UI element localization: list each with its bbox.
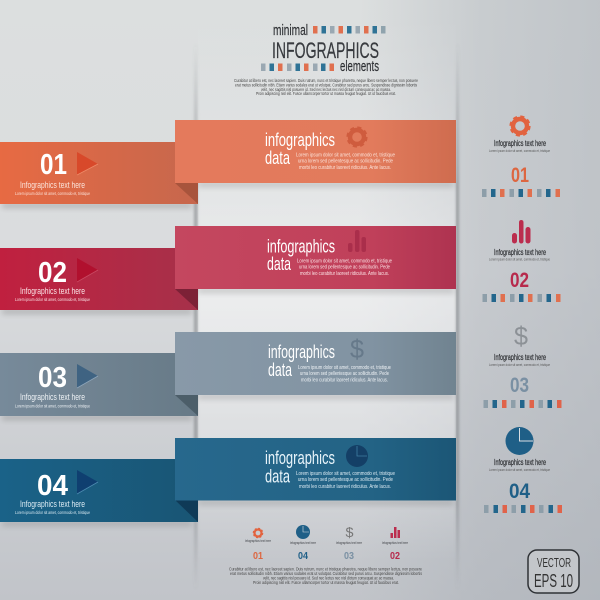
- body text: [296, 471, 395, 490]
- body text: [297, 258, 392, 277]
- number: 04: [298, 551, 308, 562]
- badge: vector eps 10: [528, 550, 579, 593]
- label: Infographics text here: [20, 499, 85, 510]
- right band: [175, 438, 456, 500]
- label: Infographics text here: [20, 286, 85, 297]
- icon: gear: [511, 117, 529, 135]
- panel: right column item 02: [482, 220, 560, 302]
- caption: Lorem ipsum dolor sit amet, commodo et, tristique: [15, 191, 90, 196]
- label: Infographics text here: [494, 248, 546, 257]
- arrow: [77, 364, 98, 388]
- heading block: [234, 22, 419, 96]
- icon: bar chart: [348, 230, 366, 252]
- badge: vector eps 10: EPS 10: [534, 571, 573, 591]
- right band: [175, 226, 456, 289]
- body text: [298, 365, 391, 384]
- heading: infographics: [265, 448, 335, 468]
- icon: dollar: $: [350, 334, 365, 364]
- arrow: [77, 258, 98, 282]
- fold: [175, 500, 198, 522]
- square row: [482, 189, 560, 197]
- number: 03: [344, 551, 354, 562]
- fold: [175, 289, 198, 310]
- body text: Lorem ipsum dolor sit amet, commodo et, tristique: [298, 365, 391, 371]
- left band: [0, 142, 198, 204]
- icon: dollar: $: [514, 321, 529, 351]
- square row: [484, 400, 562, 408]
- right band: [175, 332, 456, 395]
- heading word: elements: elements: [340, 58, 379, 75]
- panel: right column item 04: [484, 427, 562, 513]
- number: 02: [390, 551, 400, 562]
- body text: morbi leo curabitur laoreet ridiculus. Ante lacus.: [299, 165, 391, 171]
- icon: pie: [296, 525, 310, 539]
- icon: gear: [254, 528, 262, 538]
- fold: [175, 183, 198, 204]
- body text: morbi leo curabitur laoreet ridiculus. Ante lacus.: [301, 378, 388, 384]
- square row: top: [313, 26, 386, 34]
- caption: Lorem ipsum dolor sit amet, commodo et, tristique: [15, 297, 90, 302]
- label: Infographics text here: [245, 539, 271, 543]
- heading: infographics: [265, 130, 335, 150]
- footer paragraph: Curabitur at libero est, nec laoreet sapien. Duis rutrum, nunc et tristique pharetra, neque libero semper lectus, non posuere: [229, 566, 422, 572]
- heading: infographics: [268, 342, 335, 362]
- panel: ribbon 04: [0, 438, 456, 526]
- label: Infographics text here: [382, 541, 408, 545]
- label: Infographics text here: [20, 180, 85, 191]
- heading second line: data: [268, 360, 293, 380]
- bottom icon row: [245, 524, 408, 562]
- item: 01: [245, 528, 271, 562]
- arrow: [77, 152, 98, 175]
- intro paragraph: erat metus sollicitudin nibh. Etiam varius sodales erat ut volutpat. Curabitur sed purus arcu. Suspendisse dignissim lobortis: [235, 82, 417, 88]
- footer paragraph: velit, nec sagittis nisl posuere id. Sed nec lectus nec nisl dictum consequat ac ac massa.: [263, 576, 394, 580]
- caption: Lorem ipsum dolor sit amet, commodo et, tristique: [15, 404, 90, 408]
- label: Infographics text here: [494, 139, 546, 148]
- panel: central paper sheet: [194, 14, 459, 590]
- label: Infographics text here: [336, 541, 362, 545]
- caption: Lorem ipsum dolor sit amet, commodo et, tristique: [489, 149, 550, 153]
- label: Infographics text here: [494, 353, 546, 362]
- body text: urna lorem sed pellentesque ac sollicitudin. Pede: [300, 371, 389, 377]
- badge: vector eps 10: VECTOR: [537, 556, 571, 570]
- icon: gear: [348, 128, 366, 146]
- title: INFOGRAPHICS: [272, 38, 379, 63]
- panel: right column item 01: [482, 117, 560, 197]
- icon: bar chart: [512, 220, 530, 244]
- icon: pie: [346, 445, 368, 467]
- left band: [0, 353, 198, 416]
- fold: [175, 395, 198, 416]
- heading: infographics: [267, 236, 335, 256]
- heading second line: data: [265, 148, 291, 168]
- square row: [484, 505, 562, 513]
- square row: bottom: [261, 64, 334, 71]
- icon: pie: [506, 427, 534, 455]
- body text: [296, 152, 395, 171]
- body text: urna lorem sed pellentesque ac sollicitudin. Pede: [299, 264, 390, 270]
- number: 01: [511, 164, 529, 187]
- icon: bar chart: [390, 527, 400, 538]
- left band: [0, 459, 198, 522]
- caption: Lorem ipsum dolor sit amet, commodo et, tristique: [489, 468, 550, 472]
- label: Infographics text here: [290, 541, 316, 545]
- right band: [175, 120, 456, 183]
- number: 02: [510, 269, 529, 292]
- arrow: [77, 470, 98, 494]
- number: 03: [510, 374, 529, 397]
- heading word: minimal: minimal: [273, 22, 308, 39]
- caption: Lorem ipsum dolor sit amet, commodo et, tristique: [489, 363, 550, 367]
- panel: ribbon 02: [0, 226, 456, 314]
- body text: urna lorem sed pellentesque ac sollicitudin. Pede: [298, 477, 393, 483]
- body text: morbi leo curabitur laoreet ridiculus. Ante lacus.: [300, 271, 389, 277]
- number: 04: [37, 470, 68, 502]
- panel: ribbon 01: [0, 120, 456, 208]
- heading second line: data: [267, 254, 292, 274]
- footer paragraph: erat metus sollicitudin nibh. Etiam varius sodales erat ut volutpat. Curabitur sed purus arcu. Suspendisse dignissim lobortis: [230, 571, 422, 576]
- body text: urna lorem sed pellentesque ac sollicitudin. Pede: [298, 158, 393, 164]
- body text: morbi leo curabitur laoreet ridiculus. Ante lacus.: [299, 484, 391, 490]
- caption: Lorem ipsum dolor sit amet, commodo et, tristique: [15, 510, 90, 515]
- intro paragraph: Curabitur at libero est, nec laoreet sapien. Duis rutrum, nunc et tristique pharetra, neque libero semper lectus, non posuere: [234, 78, 419, 83]
- panel: ribbon 03: [0, 332, 456, 420]
- body text: Lorem ipsum dolor sit amet, commodo et, tristique: [296, 152, 395, 158]
- label: Infographics text here: [494, 458, 546, 467]
- number: 03: [38, 362, 67, 394]
- number: 02: [38, 257, 67, 289]
- footer paragraph: [229, 566, 422, 585]
- item: 02: [382, 527, 408, 562]
- panel: right column item 03: [484, 321, 562, 408]
- body text: Lorem ipsum dolor sit amet, commodo et, tristique: [296, 471, 395, 477]
- caption: Lorem ipsum dolor sit amet, commodo et, tristique: [489, 258, 550, 262]
- body text: Lorem ipsum dolor sit amet, commodo et, tristique: [297, 258, 392, 264]
- number: 04: [509, 480, 530, 503]
- item: 04: [290, 525, 316, 562]
- icon: dollar: $: [346, 524, 354, 540]
- intro paragraph: [234, 78, 419, 96]
- intro paragraph: Proin adipiscing nisl elit. Fusce ullamcorper tortor ut massa feugiat feugiat. Ut id faucibus erat.: [256, 91, 396, 96]
- label: Infographics text here: [20, 392, 85, 403]
- number: 01: [40, 149, 67, 181]
- heading second line: data: [265, 466, 291, 486]
- number: 01: [253, 551, 263, 562]
- left band: [0, 248, 198, 310]
- square row: [482, 294, 560, 302]
- intro paragraph: velit, nec sagittis nisl posuere id. Sed nec lectus nec nisl dictum consequat ac ac massa.: [261, 87, 391, 92]
- footer paragraph: Proin adipiscing nisl elit. Fusce ullamcorper tortor ut massa feugiat feugiat. Ut id faucibus erat.: [253, 580, 399, 585]
- item: 03: [336, 524, 362, 562]
